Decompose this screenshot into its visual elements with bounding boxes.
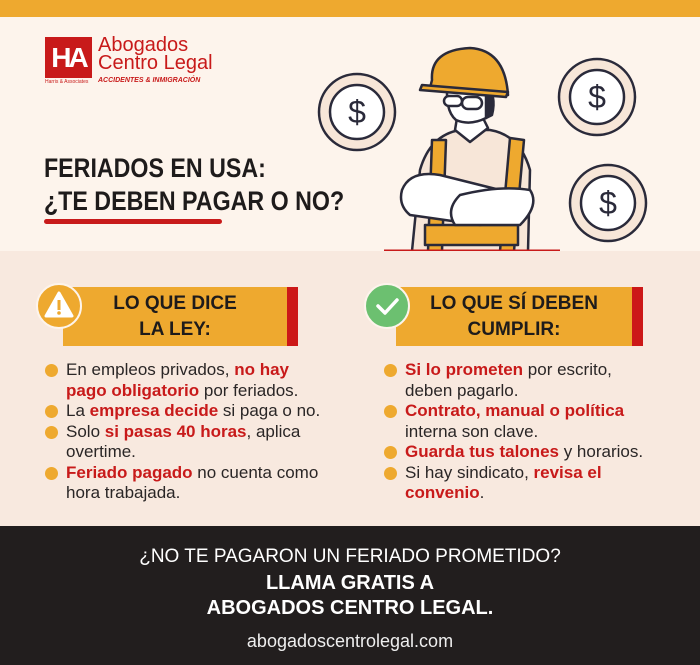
icon: coin 2 xyxy=(559,59,635,135)
bullet list: interna son clave. xyxy=(405,422,538,440)
logo text xyxy=(98,34,213,74)
icon: coin 1 xyxy=(319,74,395,150)
panel: lo que dice la ley xyxy=(36,283,320,502)
footer call to action: ABOGADOS CENTRO LEGAL. xyxy=(207,597,493,619)
footer call to action xyxy=(207,572,493,619)
logo: ACCIDENTES & INMIGRACIÓN xyxy=(98,77,200,84)
logo text: Centro Legal xyxy=(98,52,213,74)
bullet list: La empresa decide si paga o no. xyxy=(66,401,320,420)
heading box: LO QUE DICE xyxy=(113,293,237,314)
bullet list: Si hay sindicato, revisa el xyxy=(405,462,602,482)
bullet list: overtime. xyxy=(66,442,136,461)
worker xyxy=(384,48,560,251)
illustration: coins and worker xyxy=(318,46,648,251)
icon: coin 1: $ xyxy=(348,94,366,130)
bullet list: Contrato, manual o política xyxy=(405,401,624,420)
bullet list: hora trabajada. xyxy=(66,483,180,502)
top bar xyxy=(0,0,700,17)
lower section background xyxy=(0,251,700,526)
title underline xyxy=(44,219,222,224)
bullet list xyxy=(384,360,643,502)
bullet list: Guarda tus talones y horarios. xyxy=(405,442,643,461)
heading box: CUMPLIR: xyxy=(468,319,560,340)
bullet list xyxy=(45,360,320,502)
logo mark xyxy=(45,37,92,78)
panel: lo que si deben cumplir xyxy=(364,283,643,502)
heading box: LO QUE SÍ DEBEN xyxy=(430,293,598,314)
footer xyxy=(0,526,700,665)
icon: warning xyxy=(36,283,82,329)
heading box xyxy=(396,287,643,346)
bullet list: En empleos privados, no hay xyxy=(66,360,289,379)
footer call to action: LLAMA GRATIS A xyxy=(266,572,434,594)
heading box: LA LEY: xyxy=(139,319,211,340)
icon: check xyxy=(364,283,410,329)
bullet list: Si lo prometen por escrito, xyxy=(405,360,612,379)
bullet list: deben pagarlo. xyxy=(405,380,518,400)
logo: Harris & Associates xyxy=(45,79,88,85)
footer url: abogadoscentrolegal.com xyxy=(247,631,453,651)
icon: coin 3 xyxy=(570,165,646,241)
bullet list: Solo si pasas 40 horas, aplica xyxy=(66,422,300,440)
logo text: Abogados xyxy=(98,34,188,56)
logo xyxy=(45,34,213,85)
bullet list: pago obligatorio por feriados. xyxy=(66,380,298,400)
icon: coin 2: $ xyxy=(588,79,606,115)
icon: coin 3: $ xyxy=(599,185,617,221)
bullet list: Feriado pagado no cuenta como xyxy=(66,462,318,482)
heading box xyxy=(63,287,298,346)
bullet list: convenio. xyxy=(405,483,484,502)
title: ¿TE DEBEN PAGAR O NO? xyxy=(44,186,344,216)
footer question: ¿NO TE PAGARON UN FERIADO PROMETIDO? xyxy=(139,546,561,567)
logo mark: HA xyxy=(51,42,86,73)
title: FERIADOS EN USA: xyxy=(44,153,266,183)
title xyxy=(44,153,344,216)
